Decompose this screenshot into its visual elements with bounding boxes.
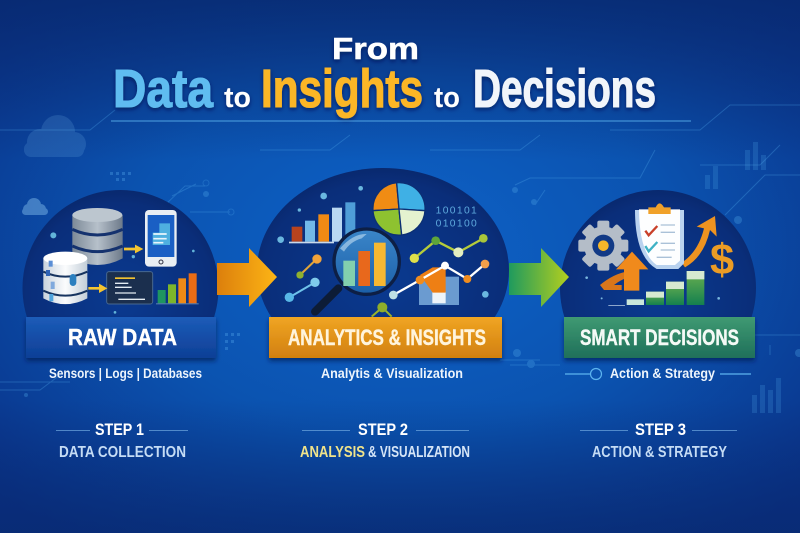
step 1 rules: [56, 430, 188, 432]
title word: to: to: [434, 82, 460, 114]
step 2 rules: [302, 430, 469, 432]
banner label: decisions: SMART DECISIONS: [580, 325, 739, 350]
background cloud small: [22, 198, 48, 215]
step 3 heading: STEP 3: [635, 420, 686, 439]
title underline: [111, 120, 691, 122]
panel: analytics and insights: [257, 168, 509, 381]
step 3: [580, 420, 737, 461]
icon: dollar sign: $: [710, 237, 734, 285]
banner: analytics: [269, 317, 502, 358]
title word: Insights: Insights: [261, 59, 423, 119]
panel: smart decisions: [560, 190, 756, 386]
bar chart: decisions: [608, 271, 704, 306]
dome: analytics: [258, 168, 509, 317]
step 2 label: analysis: ANALYSIS: [300, 444, 365, 461]
arrow: raw data to analytics: [217, 248, 277, 307]
pie chart: [373, 183, 425, 235]
step 1: [56, 420, 188, 461]
title line: From: From: [332, 31, 419, 66]
caption: decisions: Action & Strategy: [610, 365, 715, 381]
icon: growth arrow: [682, 216, 717, 267]
decorative dots: [50, 232, 195, 314]
icon: gear: [578, 221, 628, 271]
binary digits: 010100: [436, 219, 478, 230]
step 2: [300, 420, 470, 461]
icon: phone: [145, 210, 177, 267]
background circuit lines: [0, 105, 800, 397]
step 3 label: ACTION & STRATEGY: [592, 444, 727, 461]
line chart: white: [389, 260, 489, 299]
icon: tablet screen: [107, 272, 153, 304]
banner label: analytics: ANALYTICS & INSIGHTS: [288, 325, 486, 350]
background cloud large: [24, 115, 86, 157]
icon: grey database: [72, 208, 123, 265]
icons: decisions: [578, 203, 734, 306]
dome: raw data: [22, 190, 218, 317]
icon: clipboard: [635, 203, 684, 269]
icon: magnifying glass: [315, 229, 399, 312]
step 2 heading: STEP 2: [358, 420, 408, 439]
bar chart: analytics: [289, 202, 355, 243]
dome: decisions: [560, 190, 756, 317]
caption: analytics: Analytis & Visualization: [321, 365, 463, 381]
title word: Data: Data: [113, 59, 214, 119]
line chart: yellow-green: [410, 234, 488, 263]
icons: raw data: [43, 208, 199, 314]
title word: to: to: [224, 82, 251, 114]
icon: white database: [43, 252, 87, 304]
arrow: analytics to decisions: [509, 248, 569, 307]
icon: orange up arrow: [600, 252, 648, 291]
icon: yellow arrows: [88, 245, 143, 293]
title word: Decisions: Decisions: [473, 59, 656, 119]
small connected dots: [285, 254, 392, 317]
caption: raw data: Sensors | Logs | Databases: [49, 365, 202, 381]
binary digits: 100101: [436, 205, 478, 216]
decorative dots: [585, 276, 720, 300]
banner label: raw data: RAW DATA: [68, 324, 177, 350]
title: [113, 31, 656, 119]
bar chart: raw data: [156, 273, 199, 304]
step 3 rules: [580, 430, 737, 432]
box chart: [419, 267, 459, 305]
step 1 heading: STEP 1: [95, 420, 144, 439]
banner: raw data: [26, 317, 216, 358]
binary digits: [436, 205, 478, 230]
step 1 label: DATA COLLECTION: [59, 444, 186, 461]
background faint bar charts: [705, 142, 781, 413]
banner: decisions: [564, 317, 755, 358]
step 2 label: visualization: & VISUALIZATION: [368, 444, 470, 461]
panel: raw data: [22, 190, 218, 386]
icons: analytics: [277, 183, 489, 317]
decorative dots: [277, 186, 489, 298]
caption ornament: [565, 368, 751, 380]
